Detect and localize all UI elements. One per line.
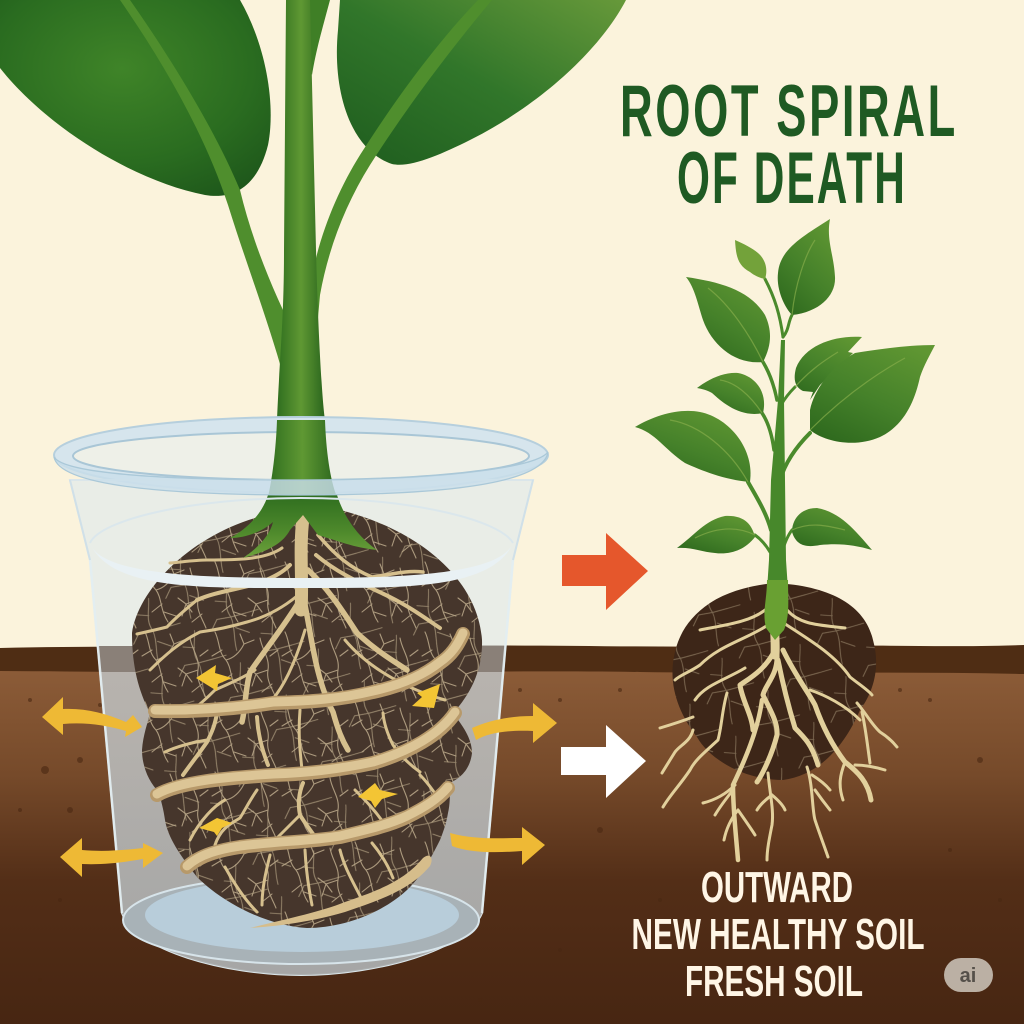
trunk: [301, 518, 303, 610]
soil ground: [0, 645, 1024, 1024]
soil clump: [672, 583, 876, 780]
darker soil line through the wall: [98, 646, 505, 672]
yellow growth arrows inside the pot: [196, 665, 440, 836]
pot wall: [70, 480, 533, 975]
pot floor: [123, 876, 479, 964]
wall below soil: [102, 672, 502, 975]
band: [90, 543, 513, 588]
ai badge: [944, 958, 993, 992]
pot front glass and rim: [54, 452, 548, 913]
red arrow: [562, 533, 648, 610]
root ball soil: [132, 507, 482, 928]
big plant stems: [120, 0, 492, 420]
leaves: [778, 219, 835, 315]
white arrow: [561, 725, 646, 798]
rim opening: [73, 432, 529, 480]
ai badge: ai: [960, 965, 976, 987]
back rim: [54, 417, 548, 493]
title: ROOT SPIRAL: [620, 70, 958, 152]
stems: [748, 279, 810, 552]
front lip: [54, 452, 548, 495]
big plant leaves: [0, 0, 626, 196]
small healthy plant: [635, 219, 935, 860]
roots: [660, 600, 897, 860]
caption text: OUTWARD: [701, 863, 853, 912]
left leaf: [0, 0, 271, 196]
plant base flare over the soil: [230, 495, 377, 558]
caption text: [632, 863, 924, 1006]
leaf veins: [670, 240, 905, 538]
pot back and body: [54, 417, 548, 975]
caption text: FRESH SOIL: [685, 957, 863, 1006]
yellow double arrows outside the pot: [42, 697, 557, 877]
title: [620, 70, 958, 219]
lower stem inside pot: [268, 420, 337, 497]
side walls highlight: [90, 560, 513, 913]
spiral roots: [155, 633, 463, 928]
title: OF DEATH: [677, 137, 907, 219]
background: cream sky: [0, 0, 1024, 650]
branching roots in the pot: [137, 518, 445, 912]
right leaf: [337, 0, 626, 165]
